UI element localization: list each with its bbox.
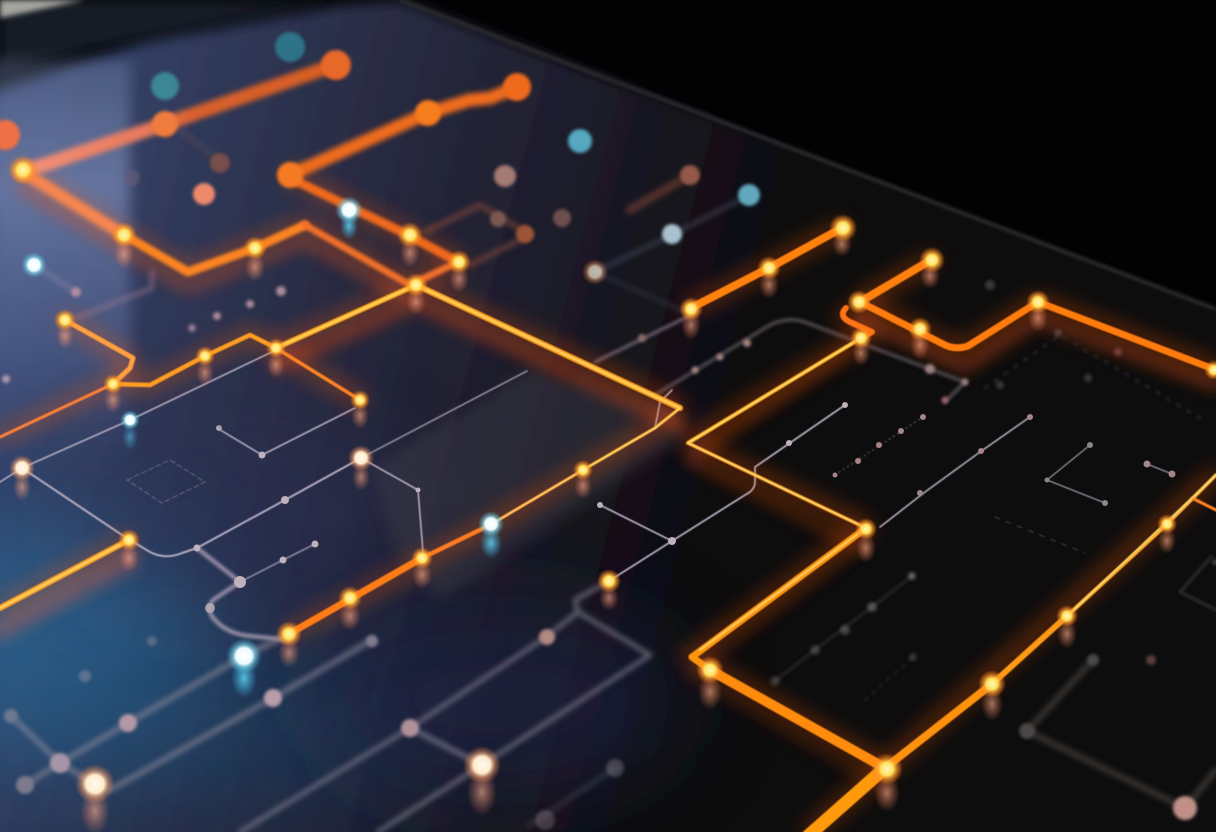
- dim out-of-focus gray traces at the top: [34, 130, 749, 318]
- orange glow halo under traces: [0, 172, 1216, 832]
- trace: main right middle: [692, 528, 866, 670]
- bright orange circuit traces: [0, 228, 1216, 832]
- trace: main right lower: [885, 684, 992, 768]
- trace: small hook: [843, 308, 872, 338]
- foreground dark gray traces right: [1027, 660, 1216, 808]
- cyan and white nodes: [9, 196, 608, 804]
- soft out-of-focus junction dots: [2, 280, 1216, 830]
- trace: zigzag left: [23, 172, 124, 235]
- trace: left branch: [276, 285, 416, 348]
- trace: far upper centre: [290, 87, 517, 175]
- trace: central diagonal: [416, 285, 680, 408]
- trace: descending centre: [290, 178, 458, 262]
- orange nodes: [8, 155, 1216, 785]
- soft red reflections of traces on the glass: [0, 190, 1216, 790]
- thin in-focus gray traces: [0, 350, 1172, 582]
- reflections beneath nodes: [13, 212, 1176, 832]
- trace: upper right short: [691, 228, 842, 308]
- trace: far upper left: [23, 65, 335, 172]
- medium gray traces: [197, 315, 1216, 700]
- blurred teal bokeh nodes: [151, 32, 760, 244]
- trace: branch to small node: [276, 348, 360, 400]
- trace: left hook: [65, 320, 133, 384]
- trace: main right upper: [688, 338, 861, 443]
- lower blurred blue-gray traces: [11, 581, 650, 832]
- large blurred orange nodes: [0, 50, 700, 243]
- trace: bright inner cores: [0, 285, 1216, 650]
- soft out-of-focus orange traces at top: [23, 65, 517, 285]
- trace: right loop: [860, 260, 931, 302]
- small sharp junction dots: [194, 402, 1176, 613]
- trace: lower left: [0, 540, 129, 608]
- trace: bottom exit: [808, 768, 885, 832]
